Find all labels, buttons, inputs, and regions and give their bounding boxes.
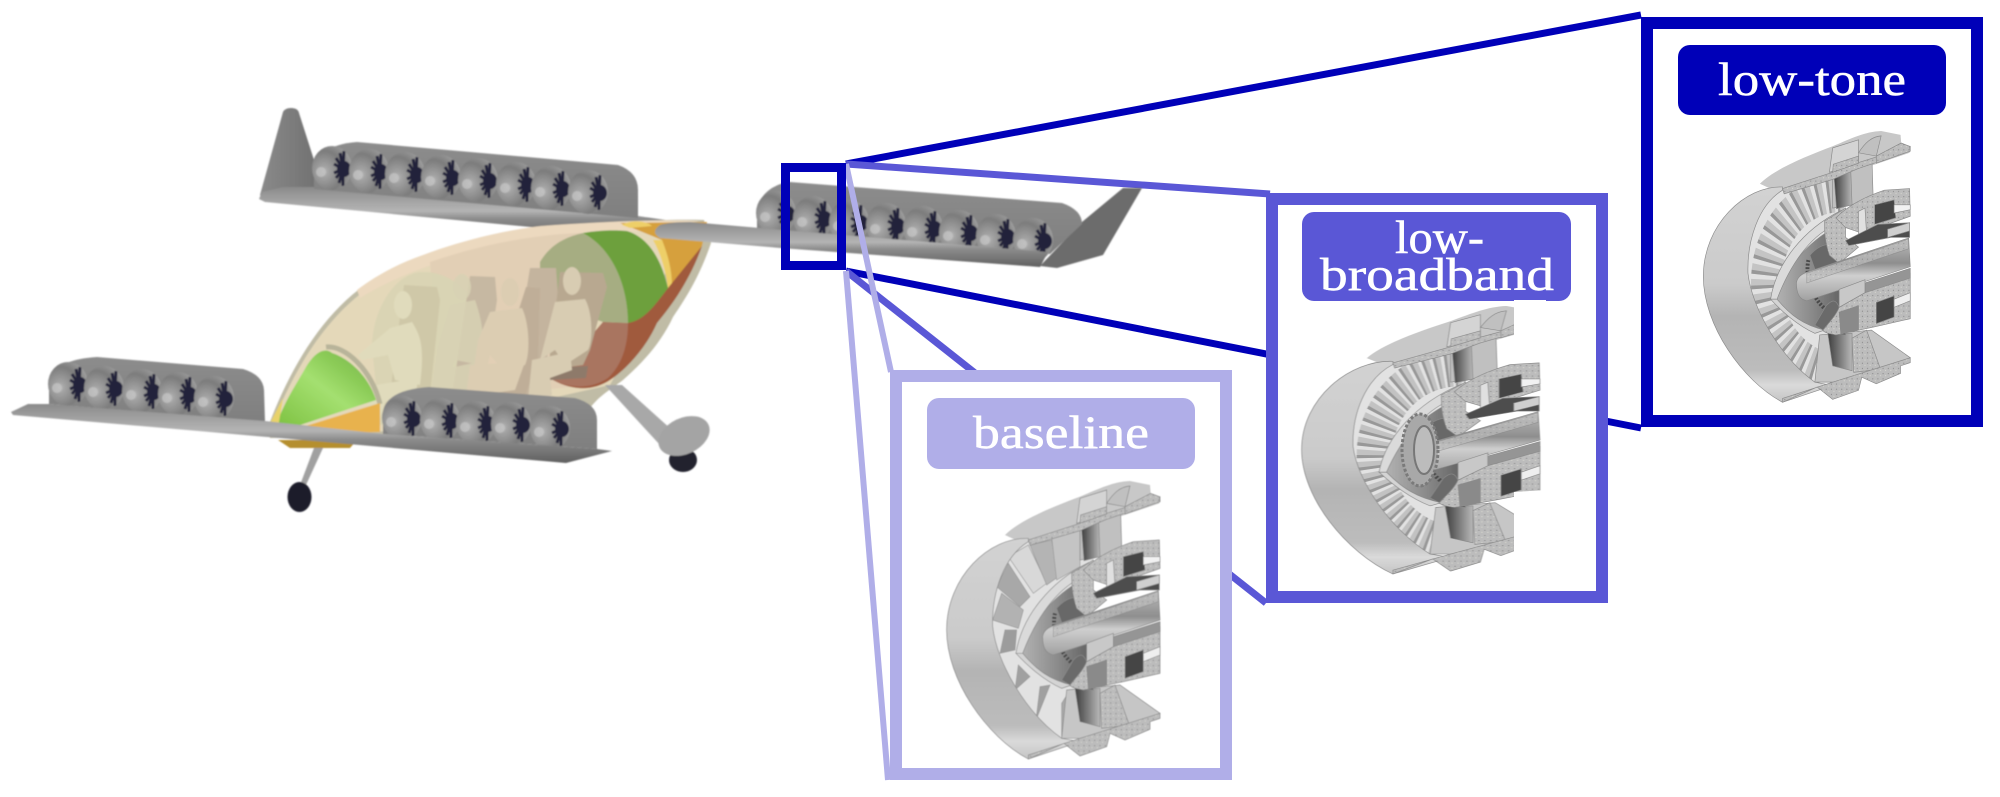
rear left fans (312, 146, 608, 214)
baseline label: baseline (973, 407, 1149, 459)
low-broadband label (1302, 212, 1571, 301)
front wing (11, 357, 612, 463)
upper peach band (357, 220, 700, 298)
orange nose wedge (293, 403, 380, 434)
baseline frame (896, 376, 1226, 774)
connector lines from the fan box to the variant frames (846, 15, 1641, 603)
passenger 4 (528, 267, 591, 400)
rear wheel (669, 448, 697, 472)
panel: low-broadband (1272, 199, 1602, 597)
low-broadband label: low- (1395, 212, 1484, 264)
low-broadband frame (1272, 199, 1602, 597)
landing gear (288, 385, 716, 512)
front wing surface (11, 404, 612, 463)
aircraft (11, 108, 1142, 512)
fin (260, 108, 314, 197)
seat front (390, 285, 440, 395)
front pod fans (382, 396, 570, 450)
seats (390, 268, 607, 415)
right pod (757, 182, 1082, 254)
passengers (358, 267, 591, 430)
passenger 2 (430, 274, 483, 420)
low-tone label (1678, 45, 1946, 115)
front strut (300, 448, 323, 485)
nose cone (275, 351, 376, 428)
under fuselage orange (278, 440, 357, 448)
fuselage shell (268, 220, 711, 438)
front right pod (383, 387, 597, 449)
rear green bulkhead light part (540, 233, 628, 323)
low-broadband fan cutaway (1302, 300, 1546, 585)
cockpit ring (326, 347, 380, 404)
right wing with pod and fin (655, 182, 1142, 268)
front cockpit bubble (372, 272, 480, 425)
rear green bulkhead dark part (583, 230, 668, 323)
yellow stripe (653, 240, 672, 289)
panel: baseline (896, 376, 1226, 774)
right fans (756, 191, 1053, 262)
passenger 1 (358, 291, 422, 425)
low-broadband label: broadband (1320, 249, 1554, 301)
right wing (655, 222, 1048, 267)
rear left pod (314, 142, 638, 218)
baseline label (927, 398, 1195, 469)
left pod (49, 357, 265, 422)
seat row 2 (450, 276, 497, 415)
seat row 3 (490, 287, 540, 410)
rear wing left with fin and pod (259, 108, 720, 240)
hub with bolts (1402, 414, 1438, 486)
panel: low-tone (1647, 23, 1977, 421)
yellow nose strip (268, 398, 283, 428)
mask: trimmed casing bottom (1514, 490, 1546, 585)
line: light bottom to baseline (846, 271, 888, 780)
red-brown lower section (553, 246, 702, 388)
rear wheel fairing (652, 408, 716, 464)
line: top to low-tone (846, 15, 1641, 164)
aft cabin wall (430, 233, 600, 400)
peach cabin skin (271, 226, 680, 432)
fuselage (268, 220, 711, 448)
baseline blades (993, 527, 1080, 737)
low-tone fan cutaway (1703, 131, 1912, 402)
fin right (1040, 188, 1142, 268)
passenger 3 (462, 278, 528, 430)
zoom box on fan (786, 168, 842, 266)
line: light top to baseline (846, 164, 891, 372)
low-tone label: low-tone (1718, 54, 1906, 106)
orange rear section (620, 222, 707, 286)
rear strut (605, 385, 672, 445)
seat row 4 (548, 272, 607, 370)
front wheel (288, 482, 312, 512)
rear wing left section (259, 187, 720, 240)
line: bottom to low-tone (846, 271, 1641, 428)
line: bottom to low-broadband (846, 271, 1266, 603)
left fans (48, 362, 234, 420)
low-tone frame (1647, 23, 1977, 421)
mask: trimmed casing top (1514, 300, 1546, 358)
seat row 3 back (510, 268, 558, 400)
seat cushion row 4 (550, 366, 588, 380)
baseline fan cutaway (947, 481, 1160, 759)
line: top to low-broadband (846, 164, 1270, 194)
